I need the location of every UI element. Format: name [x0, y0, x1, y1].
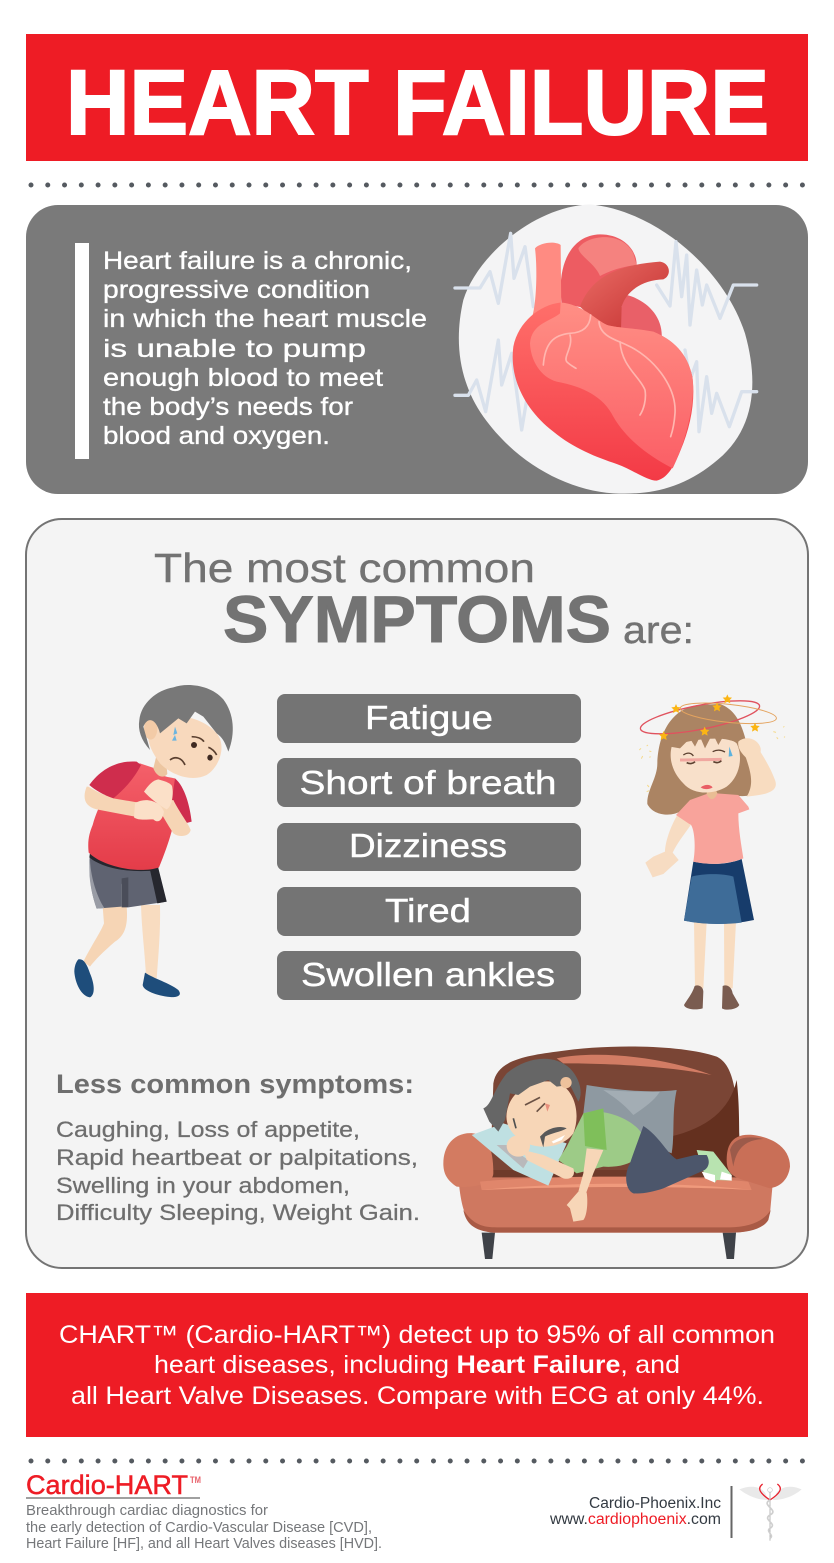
symptom: tired: Tired [385, 892, 471, 929]
footer: Cardio-HART brand: Cardio-HART [26, 1470, 188, 1500]
definition text: is unable to pump [103, 335, 366, 363]
footer: Cardio-HART brand: TM [190, 1475, 201, 1485]
footer description [26, 1503, 382, 1552]
callout: CHART detection rate [26, 1293, 808, 1437]
footer description: Breakthrough cardiac diagnostics for [26, 1503, 268, 1519]
title banner: HEART FAILURE [66, 52, 769, 154]
symptoms heading: The most common [154, 545, 535, 591]
symptom: fatigue: Fatigue [365, 699, 493, 736]
symptom: dizziness [277, 823, 581, 871]
symptoms heading: are: [623, 610, 694, 652]
callout: CHART detection rate: all Heart Valve Diseases. Compare with ECG at only 44%. [71, 1382, 764, 1410]
symptoms heading: SYMPTOMS [223, 582, 611, 656]
symptom: short of breath [277, 758, 581, 807]
icon: caduceus logo [739, 1484, 802, 1541]
footer description: Heart Failure [HF], and all Heart Valves diseases [HVD]. [26, 1536, 382, 1552]
definition text: Heart failure is a chronic, [103, 247, 412, 275]
definition text: blood and oxygen. [103, 422, 330, 450]
definition text: the body’s needs for [103, 393, 353, 421]
accent bar [75, 243, 89, 459]
footer: company name and website: Cardio-Phoenix.Inc [589, 1495, 721, 1512]
less common symptoms text: Difficulty Sleeping, Weight Gain. [56, 1200, 420, 1225]
less common symptoms text: Rapid heartbeat or palpitations, [56, 1145, 418, 1170]
less common symptoms text: Swelling in your abdomen, [56, 1173, 350, 1198]
definition text: in which the heart muscle [103, 305, 427, 333]
icon: heart with ECG waves [455, 204, 757, 494]
callout: CHART detection rate: CHART™ (Cardio-HART™) detect up to 95% of all common [59, 1321, 775, 1349]
footer: Cardio-HART brand [26, 1470, 382, 1552]
symptom: swollen ankles: Swollen ankles [301, 956, 555, 993]
symptom: dizziness: Dizziness [349, 827, 507, 864]
callout: CHART detection rate: heart diseases, including Heart Failure , and [154, 1351, 680, 1379]
definition text [103, 247, 427, 450]
symptom: tired [277, 887, 581, 936]
symptom: short of breath: Short of breath [300, 764, 556, 801]
illustration: man lying on sofa [443, 1046, 790, 1259]
panel: symptoms [26, 519, 808, 1268]
less common symptoms text [56, 1069, 420, 1225]
footer: company name and website: www.cardiophoenix.com [549, 1511, 721, 1528]
panel: definition [26, 204, 808, 494]
illustration: boy holding chest [74, 685, 233, 997]
illustration: dizzy girl [638, 694, 785, 1010]
symptoms heading [154, 545, 694, 656]
symptom: swollen ankles [277, 951, 581, 1000]
symptom: fatigue [277, 694, 581, 743]
definition text: enough blood to meet [103, 364, 383, 392]
footer description: the early detection of Cardio-Vascular Disease [CVD], [26, 1520, 372, 1536]
less common symptoms text: Less common symptoms: [56, 1069, 414, 1099]
less common symptoms text: Caughing, Loss of appetite, [56, 1117, 360, 1142]
definition text: progressive condition [103, 276, 370, 304]
footer: company name and website [549, 1495, 721, 1528]
